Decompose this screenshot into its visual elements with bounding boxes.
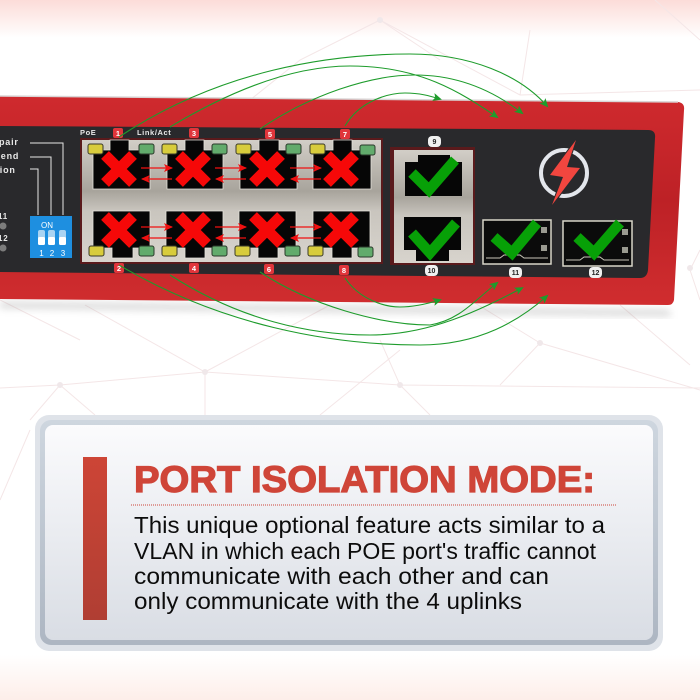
divider bbox=[131, 504, 617, 506]
green LEDs bbox=[139, 144, 375, 257]
port labels: 3 bbox=[192, 129, 196, 138]
logo icon: lightning ring bbox=[541, 140, 587, 205]
port labels: 5 bbox=[268, 130, 272, 139]
description: communicate with each other and can bbox=[134, 563, 549, 589]
port labels: 10 bbox=[428, 268, 435, 275]
port labels: 1 bbox=[116, 129, 120, 138]
port labels: 11 bbox=[512, 270, 519, 277]
red isolation arrows bbox=[141, 168, 321, 238]
uplink RJ45 block bbox=[390, 147, 475, 265]
port labels: PoE bbox=[80, 128, 96, 137]
port labels bbox=[80, 128, 602, 278]
SFP ports bbox=[483, 220, 632, 266]
port labels: 4 bbox=[192, 264, 197, 273]
switch body bbox=[0, 96, 684, 305]
description: only communicate with the 4 uplinks bbox=[134, 588, 522, 614]
green arcs top bbox=[119, 54, 547, 137]
switch labels bbox=[0, 137, 19, 243]
DIP switch: 1 bbox=[39, 249, 44, 258]
description: This unique optional feature acts similar to a bbox=[134, 512, 605, 538]
red X marks bbox=[105, 155, 355, 244]
description bbox=[134, 512, 605, 614]
port labels: Link/Act bbox=[137, 128, 171, 137]
yellow LEDs bbox=[88, 144, 325, 256]
green check marks bbox=[412, 160, 620, 253]
left labels and DIP switch bbox=[0, 137, 72, 258]
DIP switch: 3 bbox=[61, 249, 66, 258]
port labels: 8 bbox=[342, 266, 346, 275]
heading: PORT ISOLATION MODE: bbox=[134, 459, 595, 500]
green arcs bottom bbox=[119, 265, 547, 345]
port labels: 12 bbox=[592, 270, 599, 277]
bottom row RJ45 ports bbox=[93, 211, 370, 258]
top row RJ45 ports bbox=[93, 140, 371, 189]
DIP switch: ON bbox=[41, 221, 53, 230]
DIP switch: 2 bbox=[50, 249, 55, 258]
port labels: 7 bbox=[343, 130, 347, 139]
info card bbox=[35, 415, 663, 651]
port labels: 9 bbox=[433, 139, 437, 146]
accent bar bbox=[83, 457, 107, 620]
port labels: 2 bbox=[117, 264, 121, 273]
port labels: 6 bbox=[267, 265, 271, 274]
PoE port block bbox=[80, 138, 383, 264]
DIP switch bbox=[30, 216, 72, 258]
switch shadow bbox=[0, 302, 672, 316]
description: VLAN in which each POE port's traffic cannot bbox=[134, 538, 597, 564]
black front panel bbox=[0, 126, 655, 278]
